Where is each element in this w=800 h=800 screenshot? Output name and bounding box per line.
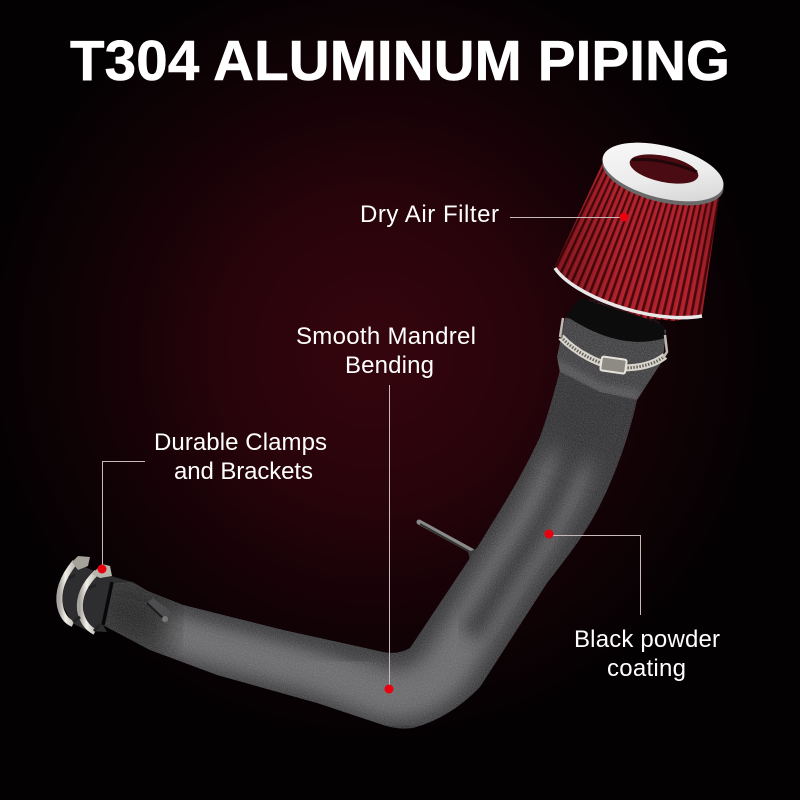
filter shading [555, 164, 718, 314]
silicone coupler and clamps [59, 556, 132, 632]
pipe side stub [147, 598, 172, 622]
bracket tab [419, 522, 481, 563]
filter pleats [555, 162, 720, 321]
callout: black powder coating: coating [607, 655, 686, 682]
callout: durable clamps and brackets [98, 429, 327, 574]
callout: black powder coating: Black powder [574, 626, 720, 653]
callout: smooth mandrel bending: Bending [345, 352, 434, 379]
filter chrome rings [554, 142, 724, 320]
callout: black powder coating [544, 530, 720, 682]
filter collar with clamp band [550, 298, 670, 400]
callout: dry air filter [360, 201, 628, 228]
callout: dry air filter: Dry Air Filter [360, 201, 499, 228]
intake pipe assembly [56, 298, 668, 729]
callout: durable clamps and brackets: Durable Clamps [154, 429, 327, 456]
callout: durable clamps and brackets: and Brackets [174, 458, 313, 485]
title: T304 ALUMINUM PIPING [70, 29, 730, 92]
pipe body [103, 370, 637, 729]
air filter element [554, 142, 724, 321]
callout: smooth mandrel bending [296, 323, 476, 694]
callout: smooth mandrel bending: Smooth Mandrel [296, 323, 476, 350]
